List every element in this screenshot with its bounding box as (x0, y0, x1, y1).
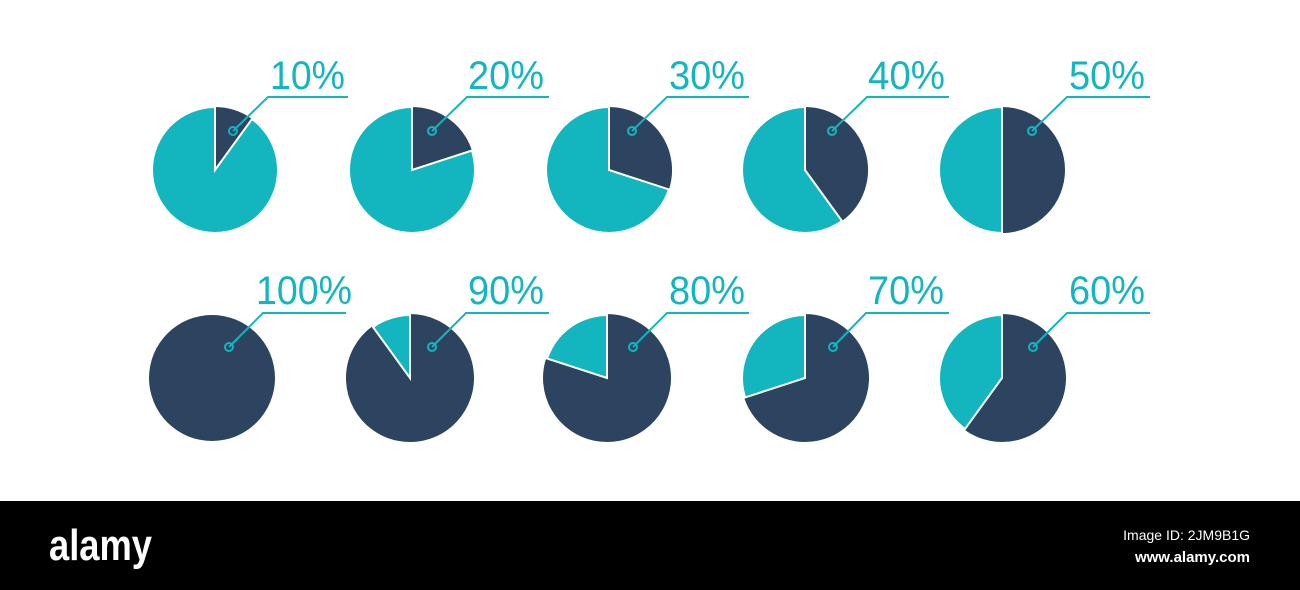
label: 20%: 20% (468, 54, 544, 98)
label: 90% (428, 269, 549, 351)
label: 40% (828, 54, 949, 135)
label: 70% (829, 269, 949, 351)
label: 80%: 80% (669, 269, 745, 313)
label: 10% (229, 54, 348, 135)
label: 90%: 90% (468, 269, 544, 313)
label: 30%: 30% (669, 54, 745, 98)
pie: 60% (940, 313, 1067, 443)
footer bar (0, 501, 1300, 590)
footer logo: alamy (49, 521, 152, 570)
label: 10%: 10% (270, 54, 345, 98)
pie: 70% (743, 313, 870, 443)
pie: 50% (940, 106, 1066, 234)
pie: 20% (350, 106, 474, 232)
footer image id: Image ID: 2JM9B1G (1123, 527, 1250, 543)
label: 30% (628, 54, 749, 135)
label: 20% (428, 54, 549, 135)
footer url: www.alamy.com (1134, 549, 1250, 566)
pie: 10% (153, 106, 277, 232)
label: 100%: 100% (256, 269, 352, 313)
label: 60% (1029, 269, 1150, 351)
label: 50% (1028, 54, 1150, 135)
label: 80% (629, 269, 749, 351)
label: 60%: 60% (1069, 269, 1145, 313)
pie: 80% (542, 313, 672, 443)
label: 40%: 40% (868, 54, 945, 98)
pie: 100% (149, 315, 275, 441)
pie: 30% (547, 106, 673, 232)
label: 100% (225, 269, 352, 351)
pie: 90% (345, 313, 475, 443)
label: 70%: 70% (868, 269, 944, 313)
label: 50%: 50% (1069, 54, 1145, 98)
pie: 40% (743, 106, 869, 232)
